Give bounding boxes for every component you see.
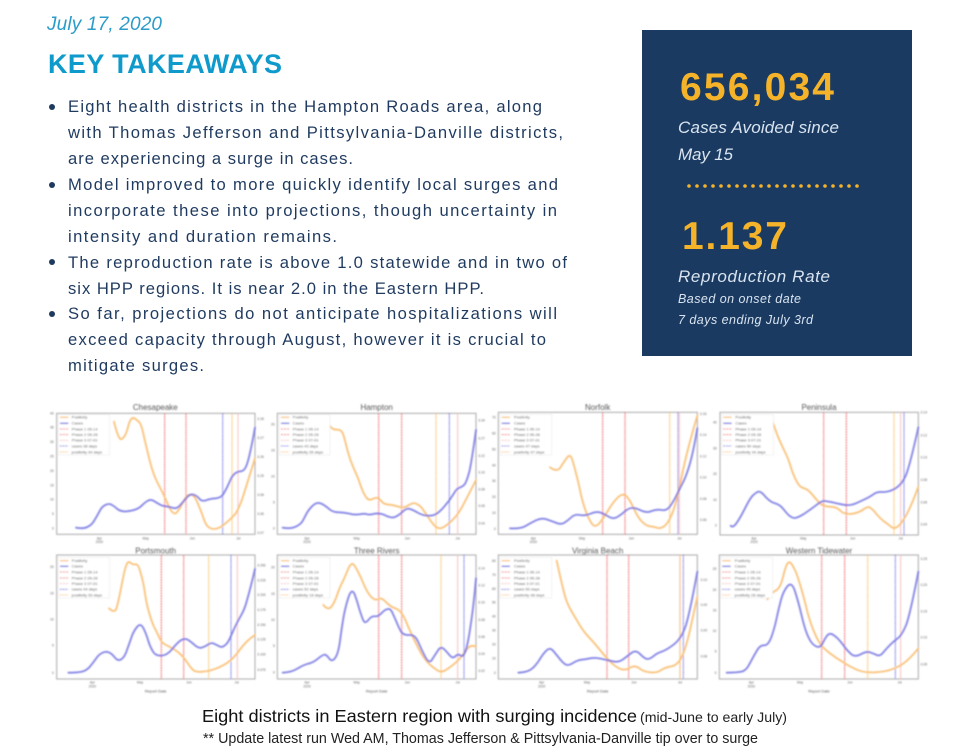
dotted divider xyxy=(689,184,858,188)
chart: Portsmouth: Phase 3 07-01 xyxy=(72,581,98,586)
chart: Peninsula: Peninsula xyxy=(801,403,837,412)
chart: Western Tidewater: positivity 28 days xyxy=(735,592,765,597)
chart: Portsmouth: positivity 30 days xyxy=(72,592,102,597)
chart: Peninsula: 0.08 xyxy=(921,478,927,482)
chart: Western Tidewater: 0.25 xyxy=(921,557,927,561)
chart: Western Tidewater: Jul xyxy=(898,681,902,685)
chart: Peninsula: Jun xyxy=(850,536,855,540)
chart: Hampton: May xyxy=(354,536,360,540)
chart: Chesapeake: Phase 1 05-14 xyxy=(72,426,98,431)
chart: Virginia Beach: 0.08 xyxy=(701,655,707,659)
chart: Peninsula: Positivity xyxy=(735,415,751,420)
chart: Hampton: positivity 35 days xyxy=(293,449,323,454)
chart: Virginia Beach: 70 xyxy=(492,573,496,577)
chart: Peninsula: Jul xyxy=(899,536,903,540)
chart: Virginia Beach: 0.10 xyxy=(701,578,707,582)
chart: Norfolk: Positivity xyxy=(514,415,530,420)
chart: Chesapeake: positivity 44 days xyxy=(72,449,102,454)
bullet 1: surge in districts: are experiencing a surge in cases. xyxy=(68,149,353,168)
chart: Three Rivers: Report Date xyxy=(366,688,388,693)
chart: Chesapeake: 0.26 xyxy=(257,455,264,459)
label: reproduction rate: Reproduction Rate xyxy=(678,267,830,286)
chart: Western Tidewater: Phase 1 05-14 xyxy=(735,569,761,574)
chart: Three Rivers: 2020 xyxy=(303,684,311,688)
chart: Peninsula: 0.14 xyxy=(921,411,927,415)
chart: Hampton xyxy=(271,403,485,544)
chart: Western Tidewater: Phase 2 05-28 xyxy=(735,575,761,580)
chart: Peninsula: 20 xyxy=(713,472,717,476)
chart: Portsmouth: Report Date xyxy=(145,688,167,693)
chart: Portsmouth: Portsmouth xyxy=(135,546,176,555)
chart: Hampton: 0.06 xyxy=(478,504,485,508)
chart: Hampton: Jun xyxy=(405,536,410,540)
caption: date range: (mid-June to early July) xyxy=(640,709,787,725)
chart: Norfolk: 2020 xyxy=(530,540,537,544)
bullet 2: model improved xyxy=(49,175,558,246)
chart: Portsmouth: 0.250 xyxy=(257,564,266,568)
chart: Portsmouth: Jun xyxy=(186,681,192,685)
chart: Portsmouth: Phase 1 05-14 xyxy=(72,569,98,574)
bullet list: key takeaways xyxy=(49,97,567,375)
chart: Hampton: 0.10 xyxy=(478,471,485,475)
chart: Virginia Beach: 10 xyxy=(492,657,496,661)
chart: Three Rivers: 0.04 xyxy=(478,652,485,656)
chart: Portsmouth: 0.175 xyxy=(257,608,266,612)
chart: Hampton: Phase 3 07-01 xyxy=(293,438,319,443)
chart: Portsmouth: 0.075 xyxy=(257,668,266,672)
bullet 1: surge in districts: with Thomas Jefferson and Pittsylvania-Danville districts, xyxy=(67,123,563,142)
chart: Virginia Beach: 30 xyxy=(492,629,496,633)
chart: Chesapeake: Phase 3 07-01 xyxy=(72,438,98,443)
chart: Hampton: 0.34 xyxy=(478,419,485,423)
chart: Western Tidewater: 5 xyxy=(715,650,717,654)
chart: Western Tidewater: 15 xyxy=(713,609,717,613)
chart: Three Rivers: 0.02 xyxy=(478,669,485,673)
bullet 4: hospital capacity: So far, projections do not anticipate hospitalizations will xyxy=(68,304,557,323)
chart: Virginia Beach: Cases xyxy=(514,564,525,569)
chart: Western Tidewater: 0.20 xyxy=(921,583,927,587)
chart: Three Rivers: 20 xyxy=(271,566,275,570)
chart: Peninsula: 0.06 xyxy=(921,500,927,504)
chart: Chesapeake: 35 xyxy=(50,426,54,430)
chart: Hampton: 0.27 xyxy=(478,436,485,440)
chart: Virginia Beach: 0.09 xyxy=(701,603,707,607)
chart: Hampton: 0.08 xyxy=(478,487,485,491)
chart: Peninsula: 0.10 xyxy=(921,456,927,460)
chart: Chesapeake: 20 xyxy=(50,469,54,473)
chart: Virginia Beach: Phase 1 05-14 xyxy=(514,569,541,574)
chart: Portsmouth: Phase 2 05-28 xyxy=(72,575,98,580)
note: seven days: 7 days ending July 3rd xyxy=(678,313,814,327)
chart: Peninsula: positivity 44 days xyxy=(735,449,766,454)
chart: Hampton: 0 xyxy=(273,526,275,530)
chart: Virginia Beach: Positivity xyxy=(514,558,530,563)
chart: Three Rivers: Three Rivers xyxy=(354,546,400,555)
bullet 2: model improved: incorporate these into projections, though uncertainty in xyxy=(68,201,557,220)
chart: Virginia Beach: Jun xyxy=(631,681,637,685)
chart: Norfolk: 0.16 xyxy=(700,412,707,416)
bullet 1: surge in districts xyxy=(49,97,563,168)
chart: Chesapeake: 10 xyxy=(50,498,54,502)
chart: Norfolk: Phase 1 05-14 xyxy=(514,426,541,431)
chart: Portsmouth: cases 44 days xyxy=(72,587,97,592)
chart: Norfolk: Cases xyxy=(514,421,525,426)
chart: Three Rivers: Phase 1 05-14 xyxy=(293,569,319,574)
chart: Norfolk: 50 xyxy=(492,447,496,451)
bullet 2: model improved: Model improved to more quickly identify local surges and xyxy=(68,175,558,194)
chart: Chesapeake: 0.28 xyxy=(257,417,264,421)
bullet 1: surge in districts: Eight health districts in the Hampton Roads area, along xyxy=(68,97,542,116)
chart: Western Tidewater: 0.10 xyxy=(921,635,927,639)
chart: Three Rivers: Jun xyxy=(405,681,410,685)
chart: Chesapeake: Chesapeake xyxy=(133,403,178,412)
chart: Western Tidewater: 10 xyxy=(713,629,717,633)
chart: Western Tidewater: Report Date xyxy=(808,688,831,693)
chart: Norfolk: 30 xyxy=(492,479,496,483)
chart: Portsmouth: Cases xyxy=(72,564,83,569)
chart: Norfolk: 40 xyxy=(492,463,496,467)
chart: Western Tidewater: 0.05 xyxy=(921,662,927,666)
chart: Three Rivers: 0 xyxy=(273,671,275,675)
chart: Western Tidewater: Western Tidewater xyxy=(786,546,853,555)
chart: Western Tidewater: 25 xyxy=(713,567,717,571)
chart: Peninsula: Apr xyxy=(751,536,757,540)
chart: Norfolk: 10 xyxy=(492,511,496,515)
chart: Norfolk xyxy=(492,403,707,544)
chart: Portsmouth: 0.200 xyxy=(257,593,266,597)
chart: Hampton: 10 xyxy=(271,474,275,478)
bullet 3: reproduction rate: The reproduction rate is above 1.0 statewide and in two of xyxy=(68,253,567,272)
chart: Norfolk: cases 47 days xyxy=(514,443,539,448)
chart: Western Tidewater: 20 xyxy=(713,588,717,592)
chart: Virginia Beach: Virginia Beach xyxy=(572,546,623,555)
chart: Norfolk: 0.10 xyxy=(700,475,707,479)
chart: Chesapeake: 0.08 xyxy=(257,493,264,497)
chart: Virginia Beach: 50 xyxy=(492,601,496,605)
chart: Chesapeake: 5 xyxy=(52,512,54,516)
chart: Virginia Beach: Jul xyxy=(678,681,682,685)
bullet 3: reproduction rate xyxy=(49,253,567,298)
chart: Virginia Beach: 40 xyxy=(492,615,496,619)
stat: reproduction rate: 1.137 xyxy=(682,215,787,258)
bullet 4: hospital capacity xyxy=(49,304,557,375)
chart: Peninsula: 0.04 xyxy=(921,523,927,527)
chart: Three Rivers: Cases xyxy=(293,564,304,569)
chart: Norfolk: Phase 2 05-28 xyxy=(514,432,541,437)
chart: Portsmouth: 0.100 xyxy=(257,652,266,656)
chart: Chesapeake: 0.07 xyxy=(257,531,264,535)
chart: Virginia Beach: Phase 3 07-01 xyxy=(514,581,541,586)
chart: Peninsula: 0.12 xyxy=(921,433,927,437)
heading: key takeaways: KEY TAKEAWAYS xyxy=(48,49,282,79)
chart: Portsmouth xyxy=(50,546,266,693)
chart: Norfolk: Jun xyxy=(629,536,634,540)
chart: Virginia Beach: May xyxy=(584,681,590,685)
chart: Hampton: 2020 xyxy=(303,540,311,544)
chart: Three Rivers: 0.14 xyxy=(478,566,485,570)
chart: Portsmouth: May xyxy=(137,681,143,685)
chart: Virginia Beach: Apr xyxy=(539,681,545,685)
bullet 4: hospital capacity: mitigate surges. xyxy=(68,356,204,375)
chart: Hampton: Positivity xyxy=(293,415,308,420)
chart: Three Rivers: Jul xyxy=(456,681,460,685)
chart: Virginia Beach xyxy=(492,546,707,693)
chart: Chesapeake: Apr xyxy=(97,536,103,540)
bullet 4: hospital capacity: exceed capacity through August, however it is crucial to xyxy=(68,330,546,349)
chart: Three Rivers: Phase 3 07-01 xyxy=(293,581,319,586)
chart: Three Rivers: 0.06 xyxy=(478,635,485,639)
chart: Western Tidewater: 0.15 xyxy=(921,609,927,613)
chart: Norfolk: 0 xyxy=(494,527,496,531)
chart: Western Tidewater: cases 45 days xyxy=(735,587,760,592)
chart: Chesapeake: 30 xyxy=(50,440,54,444)
chart: Virginia Beach: 60 xyxy=(492,587,496,591)
chart: Norfolk: 0.12 xyxy=(700,455,707,459)
chart: Western Tidewater: Jun xyxy=(847,681,853,685)
caption: update note: ** Update latest run Wed AM, Thomas Jefferson & Pittsylvania-Danville tip over to surge xyxy=(203,731,758,747)
chart: Three Rivers: Positivity xyxy=(293,558,308,563)
chart: Chesapeake: 2020 xyxy=(96,540,103,544)
chart: Portsmouth: 15 xyxy=(50,592,54,596)
chart: Virginia Beach: 20 xyxy=(492,642,496,646)
chart: Western Tidewater: Positivity xyxy=(735,558,750,563)
chart: Peninsula: 30 xyxy=(713,446,717,450)
chart: Western Tidewater: Phase 3 07-01 xyxy=(735,581,761,586)
chart: Chesapeake: Phase 2 05-28 xyxy=(72,432,98,437)
chart: Hampton: Apr xyxy=(304,536,310,540)
chart: Portsmouth: Jul xyxy=(235,681,239,685)
chart: Three Rivers: 0.08 xyxy=(478,618,485,622)
bullet 3: reproduction rate: six HPP regions. It is near 2.0 in the Eastern HPP. xyxy=(68,279,484,298)
chart: Norfolk: 0.06 xyxy=(700,518,707,522)
chart: Western Tidewater: 0 xyxy=(715,671,717,675)
chart: Hampton: 0.22 xyxy=(478,454,485,458)
chart: Three Rivers: May xyxy=(354,681,360,685)
chart: Chesapeake: cases 38 days xyxy=(72,443,97,448)
chart: Hampton: Jul xyxy=(456,536,460,540)
chart: Virginia Beach: 0.09 xyxy=(701,629,707,633)
chart: Norfolk: 20 xyxy=(492,495,496,499)
panel: key statistics xyxy=(642,30,912,356)
chart: Peninsula: 2020 xyxy=(750,540,758,544)
chart: Portsmouth: Apr xyxy=(90,681,96,685)
chart: Hampton: 5 xyxy=(273,500,275,504)
chart: Hampton: Cases xyxy=(293,421,304,426)
chart: Norfolk: 60 xyxy=(492,431,496,435)
chart: Hampton: cases 43 days xyxy=(293,443,318,448)
chart: Peninsula xyxy=(713,403,927,544)
chart: Portsmouth: 20 xyxy=(50,565,54,569)
chart: Virginia Beach: 0 xyxy=(494,671,496,675)
chart: Chesapeake: Cases xyxy=(72,421,83,426)
chart: Virginia Beach: positivity 48 days xyxy=(514,592,544,597)
chart: Chesapeake: 15 xyxy=(50,483,54,487)
chart: Norfolk: 0.14 xyxy=(700,433,707,437)
chart: Chesapeake: 0.06 xyxy=(257,512,264,516)
chart: Norfolk: Norfolk xyxy=(585,403,610,412)
chart: Three Rivers: 0.10 xyxy=(478,601,485,605)
chart: Hampton: Hampton xyxy=(360,403,393,412)
chart: Hampton: 0.04 xyxy=(478,521,485,525)
chart: Portsmouth: 0.125 xyxy=(257,638,266,642)
chart: Peninsula: 10 xyxy=(713,498,717,502)
chart: Peninsula: Cases xyxy=(735,421,747,426)
chart: Western Tidewater: May xyxy=(797,681,803,685)
bullet 2: model improved: intensity and duration remains. xyxy=(68,227,337,246)
chart: Portsmouth: 0.225 xyxy=(257,579,266,583)
chart: Chesapeake: May xyxy=(143,536,149,540)
chart: Three Rivers xyxy=(271,546,485,693)
chart: Chesapeake: Positivity xyxy=(72,415,87,420)
caption: surging districts: Eight districts in Eastern region with surging incidence xyxy=(202,706,637,726)
chart: Portsmouth: 10 xyxy=(50,618,54,622)
chart: Hampton: Phase 2 05-28 xyxy=(293,432,319,437)
chart: Chesapeake: 0.27 xyxy=(257,436,264,440)
chart: Virginia Beach: Phase 2 05-28 xyxy=(514,575,541,580)
chart: Peninsula: May xyxy=(800,536,807,540)
chart: Virginia Beach: 80 xyxy=(492,559,496,563)
chart: Peninsula: Phase 1 05-14 xyxy=(735,426,762,431)
chart: Hampton: 20 xyxy=(271,422,275,426)
chart: Three Rivers: 10 xyxy=(271,618,275,622)
stat: cases avoided: 656,034 xyxy=(680,66,834,109)
chart: Virginia Beach: 2020 xyxy=(538,684,546,688)
chart: Chesapeake: 40 xyxy=(50,411,54,415)
chart: Chesapeake: Jun xyxy=(190,536,195,540)
chart: Hampton: Phase 1 05-14 xyxy=(293,426,319,431)
chart: Hampton: 15 xyxy=(271,448,275,452)
chart: Peninsula: Phase 2 05-28 xyxy=(735,432,762,437)
chart: Peninsula: cases 50 days xyxy=(735,443,761,448)
chart: Norfolk: Jul xyxy=(677,536,682,540)
chart: Peninsula: 0 xyxy=(715,524,717,528)
chart: Chesapeake: Jul xyxy=(236,536,241,540)
chart: Portsmouth: 2020 xyxy=(89,684,96,688)
chart: Virginia Beach: Report Date xyxy=(587,688,609,693)
chart: Chesapeake: 0 xyxy=(52,526,54,530)
chart: Western Tidewater: 2020 xyxy=(748,684,755,688)
chart: Chesapeake: 0.25 xyxy=(257,474,264,478)
chart: Western Tidewater: Apr xyxy=(749,681,755,685)
chart: Three Rivers: 0.12 xyxy=(478,584,485,588)
chart: Three Rivers: 15 xyxy=(271,592,275,596)
chart: Norfolk: 70 xyxy=(492,415,496,419)
chart: Western Tidewater xyxy=(713,546,927,693)
chart: Three Rivers: 5 xyxy=(273,644,275,648)
chart: Norfolk: Apr xyxy=(531,536,537,540)
chart: Portsmouth: Positivity xyxy=(72,558,87,563)
chart: Virginia Beach: cases 50 days xyxy=(514,587,539,592)
note: onset date: Based on onset date xyxy=(678,292,801,306)
chart: Peninsula: 40 xyxy=(713,421,717,425)
chart: Three Rivers: Apr xyxy=(304,681,310,685)
chart: Three Rivers: positivity 18 days xyxy=(293,592,323,597)
label: cases avoided: Cases Avoided since xyxy=(678,118,839,137)
chart: Three Rivers: cases 52 days xyxy=(293,587,318,592)
chart: Chesapeake: 25 xyxy=(50,454,54,458)
chart: Three Rivers: Phase 2 05-28 xyxy=(293,575,319,580)
chart: Norfolk: Phase 3 07-01 xyxy=(514,438,541,443)
chart: Norfolk: 0.08 xyxy=(700,497,707,501)
chart: Chesapeake xyxy=(50,403,264,544)
chart: Norfolk: May xyxy=(579,536,585,540)
chart: Portsmouth: 0.150 xyxy=(257,623,266,627)
label: since date: May 15 xyxy=(678,145,734,164)
date: July 17, 2020 xyxy=(46,14,162,35)
chart: Portsmouth: 5 xyxy=(52,644,54,648)
chart: Western Tidewater: Cases xyxy=(735,564,746,569)
chart: Peninsula: Phase 3 07-01 xyxy=(735,438,762,443)
chart: Norfolk: positivity 47 days xyxy=(514,449,544,454)
chart: Portsmouth: 0 xyxy=(52,671,54,675)
